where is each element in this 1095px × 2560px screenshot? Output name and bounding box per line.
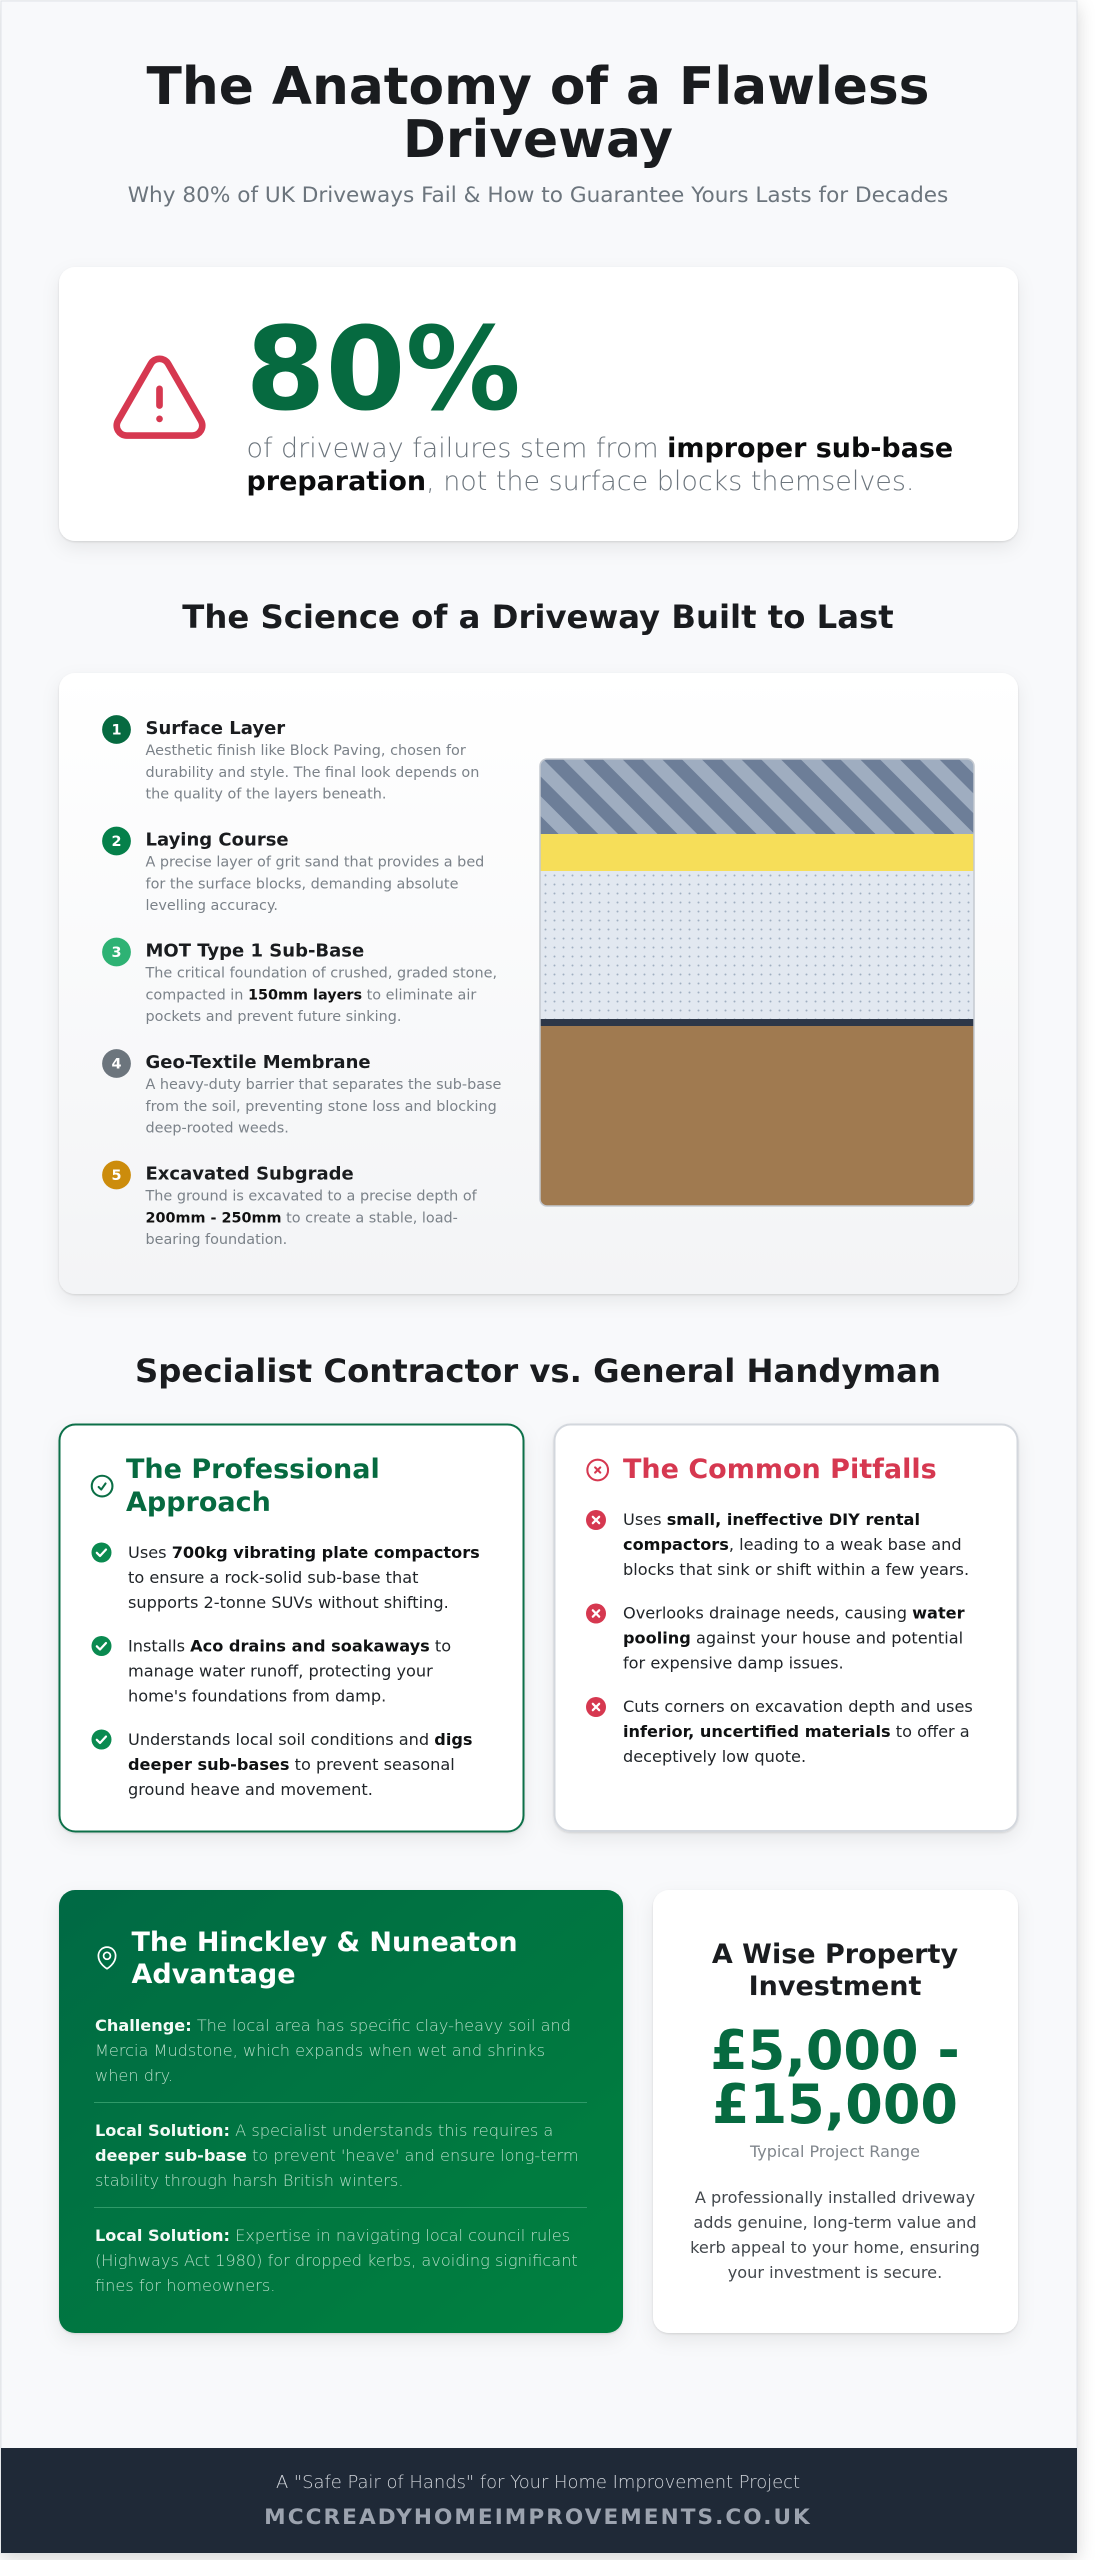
panel: 80% statistic [59,267,1018,541]
local solution: sub-base: deeper sub-base to prevent 'heave' and ensure long-term [95,2146,579,2165]
layer 1: durability and style. The final look depends on [146,765,479,781]
investment text: A professionally installed driveway [695,2188,976,2207]
item 3 [586,1697,973,1766]
challenge text: Challenge: The local area has specific clay-heavy soil and [95,2016,571,2035]
layer 2: A precise layer of grit sand that provides a bed [146,854,484,870]
layer 5: 5 [111,1168,122,1184]
local solution: council rules: Local Solution: Expertise in navigating local council rules [95,2226,570,2245]
item 3: Understands local soil conditions and digs [128,1730,473,1749]
local solution: sub-base [95,2121,579,2190]
panel: property investment: Investment [749,1971,921,2002]
layer 1 [102,715,479,802]
footer tagline: A "Safe Pair of Hands" for Your Home Improvement Project [276,2472,800,2493]
layer 2 [102,827,484,914]
local solution: council rules [95,2226,578,2295]
layer 4 [102,1049,502,1136]
icon: map pin [98,1947,116,1969]
item 1: blocks that sink or shift within a few years. [623,1560,969,1579]
local solution: council rules: (Highways Act 1980) for dropped kerbs, avoiding significant [95,2251,578,2270]
layer 3 [102,938,497,1025]
layer 2: levelling accuracy. [146,898,278,914]
layer 4: Geo-Textile Membrane [146,1052,371,1073]
challenge text [95,2016,571,2085]
item 2: Installs Aco drains and soakaways to [128,1636,451,1656]
panel: Hinckley and Nuneaton advantage [59,1890,623,2333]
challenge text: Mercia Mudstone, which expands when wet and shrinks [95,2041,545,2060]
item 2: Overlooks drainage needs, causing water [623,1604,965,1622]
diagram: driveway cross-section [540,759,974,1206]
statistic text: of driveway failures stem from improper sub-base [246,433,953,464]
heading: The Professional [126,1454,380,1485]
layer 5: 200mm - 250mm to create a stable, load- [146,1210,458,1226]
title: The Anatomy of a Flawless [146,57,930,117]
investment text [690,2188,980,2282]
layer 1: 1 [111,722,122,738]
local solution: sub-base: stability through harsh British winters. [95,2171,403,2190]
panel: common pitfalls [554,1424,1018,1831]
item 1: compactors, leading to a weak base and [623,1535,962,1554]
icon: warning triangle [117,359,202,436]
item 1: Uses small, ineffective DIY rental [623,1510,920,1529]
subtitle: Why 80% of UK Driveways Fail & How to Guarantee Yours Lasts for Decades [128,183,948,208]
panel: property investment [653,1890,1018,2333]
layer 3: pockets and prevent future sinking. [146,1009,401,1025]
footer [1,2448,1077,2553]
item 3: inferior, uncertified materials to offer a [623,1722,970,1741]
panel: professional approach: Approach [126,1487,271,1518]
layer 2: Laying Course [146,830,289,850]
heading: The Common Pitfalls [623,1454,937,1485]
local solution: council rules: fines for homeowners. [95,2276,275,2295]
panel: property investment: £15,000 [712,2073,958,2136]
layer 3: MOT Type 1 Sub-Base [146,940,364,962]
title line 2: Driveway [403,110,673,170]
icon: check circle [92,1476,112,1496]
footer website: MCCREADYHOMEIMPROVEMENTS.CO.UK [264,2505,812,2530]
item 2: pooling against your house and potential [623,1628,963,1648]
panel: professional approach [60,1424,524,1832]
panel: driveway layers [59,673,1018,1294]
statistic text line 2: preparation, not the surface blocks themselves. [246,466,914,497]
header [128,57,948,208]
heading: science: The Science of a Driveway Built to Last [182,598,894,636]
layer 3: 3 [111,945,122,961]
item 2: for expensive damp issues. [623,1654,844,1672]
item 3: Cuts corners on excavation depth and uses [623,1697,973,1716]
layer 4: A heavy-duty barrier that separates the sub-base [146,1077,502,1093]
layer 1: Surface Layer [146,718,285,739]
item 1: Uses 700kg vibrating plate compactors [128,1543,480,1562]
heading: The Hinckley & Nuneaton [132,1927,518,1958]
layer 5: bearing foundation. [146,1232,287,1248]
icon: x circle [587,1460,608,1480]
layer 2: 2 [111,834,122,850]
item 2: manage water runoff, protecting your [128,1662,433,1680]
layer 2: for the surface blocks, demanding absolute [146,876,459,892]
layer 5: The ground is excavated to a precise depth of [144,1188,478,1204]
layer 1: the quality of the layers beneath. [146,786,386,802]
item 3: deeper sub-bases to prevent seasonal [128,1755,455,1774]
item 1: to ensure a rock-solid sub-base that [128,1568,418,1587]
heading: A Wise Property [712,1939,959,1970]
item 2: home's foundations from damp. [128,1686,386,1706]
challenge text: when dry. [95,2066,173,2085]
item 1: supports 2-tonne SUVs without shifting. [128,1593,449,1612]
layer 5 [102,1161,478,1248]
investment text: kerb appeal to your home, ensuring [690,2238,980,2257]
layer 3: The critical foundation of crushed, graded stone, [144,966,497,982]
item 3: ground heave and movement. [128,1780,373,1799]
item 3 [92,1730,473,1799]
investment text: your investment is secure. [728,2263,942,2282]
panel: Hinckley and Nuneaton advantage: Advantage [132,1959,296,1990]
local solution: sub-base: Local Solution: A specialist understands this requires a [95,2121,553,2140]
price caption: Typical Project Range [749,2142,920,2161]
layer 4: 4 [111,1056,122,1072]
item 2 [92,1636,451,1706]
layer 1: Aesthetic finish like Block Paving, chosen for [146,743,466,759]
layer 5: Excavated Subgrade [146,1164,354,1184]
heading: comparison: Specialist Contractor vs. General Handyman [135,1352,941,1390]
layer 4: deep-rooted weeds. [146,1120,289,1136]
item 3: deceptively low quote. [623,1747,806,1766]
layer 3: compacted in 150mm layers to eliminate air [146,988,476,1004]
layer 4: from the soil, preventing stone loss and blocking [146,1099,497,1115]
item 1 [92,1542,480,1612]
price range: £5,000 - [710,2019,960,2082]
item 2 [586,1604,965,1672]
investment text: adds genuine, long-term value and [693,2213,977,2232]
item 1 [586,1510,969,1579]
big number: 80% [246,303,521,437]
